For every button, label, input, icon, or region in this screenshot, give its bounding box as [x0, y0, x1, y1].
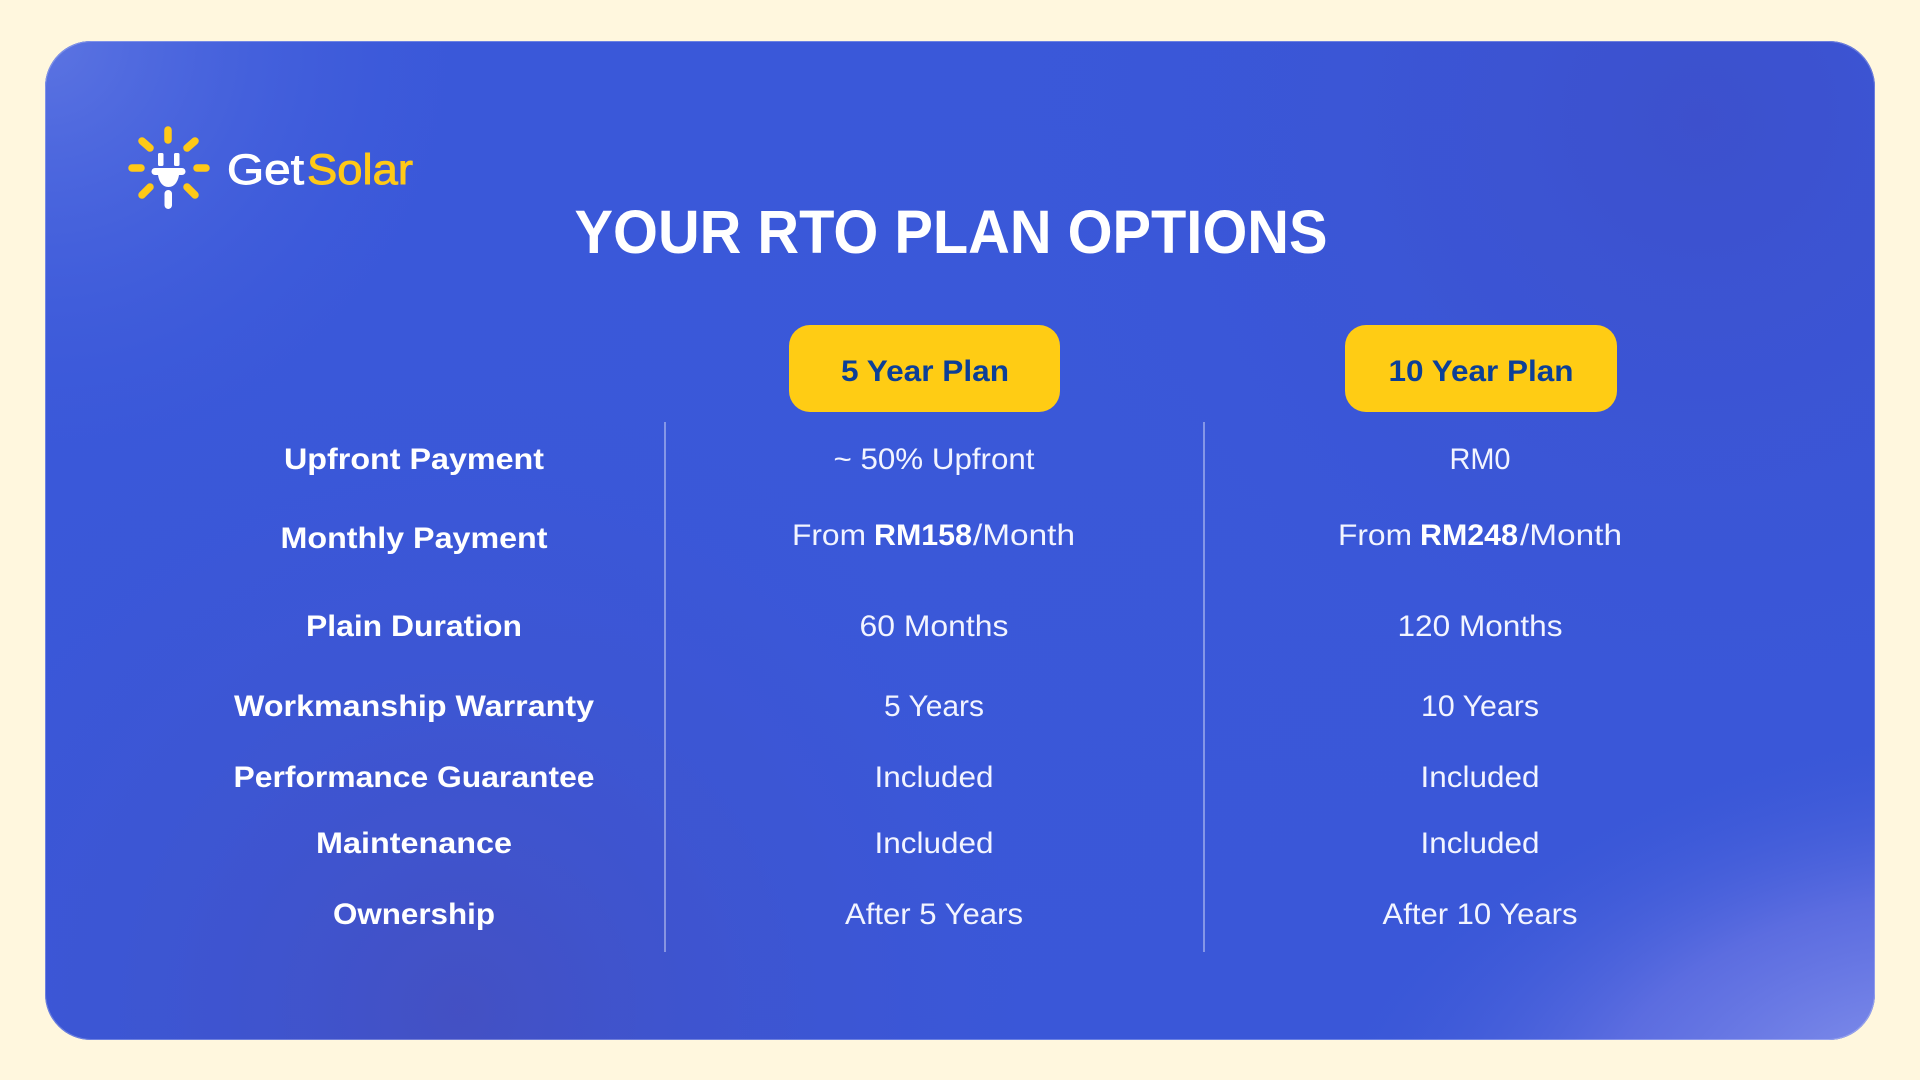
icon: sun plug — [132, 130, 206, 209]
logo wordmark — [227, 146, 413, 194]
column: 10 year plan values: Included — [1420, 827, 1540, 860]
column: 5 year plan values — [792, 443, 1075, 931]
row labels: Workmanship Warranty — [234, 690, 594, 723]
plan header: 10 Year Plan — [1345, 325, 1617, 412]
column: 10 year plan values — [1338, 443, 1622, 931]
plan header: 10 Year Plan: 10 Year Plan — [1388, 355, 1574, 388]
column: 5 year plan values: ~ 50% Upfront — [834, 443, 1035, 476]
monthly payment 10 year: /Month — [1520, 519, 1622, 552]
logo wordmark: Solar — [307, 146, 413, 194]
row labels: Performance Guarantee — [234, 761, 594, 794]
column: 10 year plan values: After 10 Years — [1382, 898, 1578, 931]
column: 5 year plan values: Included — [874, 827, 994, 860]
plan header: 5 Year Plan: 5 Year Plan — [841, 355, 1009, 388]
monthly payment 5 year: RM158 — [874, 519, 972, 552]
logo wordmark: Get — [227, 146, 304, 194]
column: 10 year plan values: 10 Years — [1421, 690, 1539, 723]
row labels: Maintenance — [316, 827, 512, 860]
monthly payment 10 year — [1338, 519, 1622, 552]
monthly payment 10 year: RM248 — [1420, 519, 1518, 552]
row labels: Monthly Payment — [280, 522, 548, 555]
title: YOUR RTO PLAN OPTIONS — [574, 198, 1328, 266]
row labels: Upfront Payment — [284, 443, 544, 476]
row labels: Plain Duration — [306, 610, 522, 643]
row labels — [234, 443, 594, 931]
logo: GetSolar — [132, 130, 413, 209]
monthly payment 5 year: From — [792, 519, 866, 552]
monthly payment 5 year: /Month — [973, 519, 1075, 552]
column: 10 year plan values: 120 Months — [1398, 610, 1562, 643]
column: 5 year plan values: Included — [874, 761, 994, 794]
column: 5 year plan values: 60 Months — [860, 610, 1008, 643]
monthly payment 5 year — [792, 519, 1075, 552]
monthly payment 10 year: From — [1338, 519, 1412, 552]
column: 5 year plan values: 5 Years — [884, 690, 984, 723]
plan header: 5 Year Plan — [789, 325, 1060, 412]
column: 10 year plan values: RM0 — [1450, 443, 1510, 476]
row labels: Ownership — [333, 898, 495, 931]
column: 5 year plan values: After 5 Years — [845, 898, 1023, 931]
column: 10 year plan values: Included — [1420, 761, 1540, 794]
